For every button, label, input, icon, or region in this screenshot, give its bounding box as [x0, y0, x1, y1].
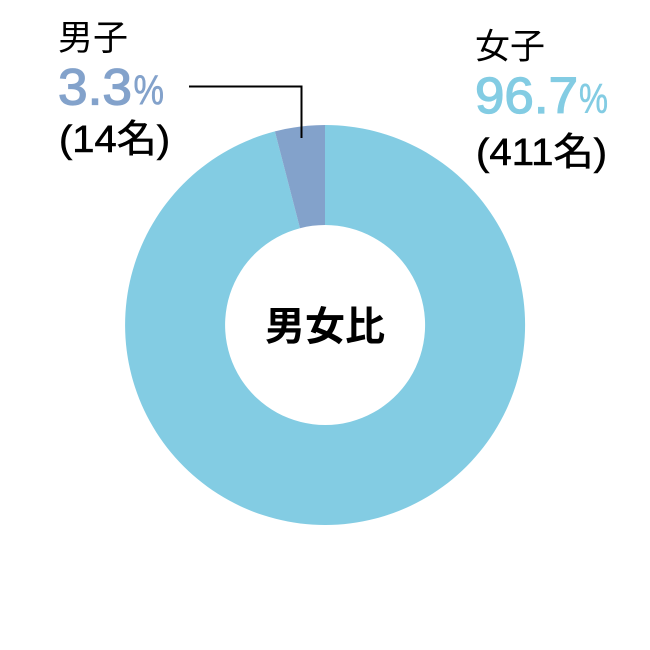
male percentage: %	[134, 66, 164, 114]
center label: 男女比	[265, 305, 385, 349]
label: female	[475, 18, 608, 174]
male count: (14名)	[59, 119, 170, 161]
female count: (411名)	[476, 132, 607, 174]
segment: male 3.3%	[275, 125, 325, 228]
female percentage: %	[579, 75, 608, 122]
label: male	[58, 10, 170, 161]
male percentage	[58, 58, 164, 116]
leader line	[189, 86, 302, 138]
male heading: 男子	[58, 10, 128, 61]
female percentage: 96.7	[475, 67, 578, 124]
donut chart	[125, 125, 525, 525]
segment: female 96.7%	[125, 125, 525, 525]
female heading: 女子	[475, 18, 545, 70]
male percentage: 3.3	[58, 58, 132, 116]
